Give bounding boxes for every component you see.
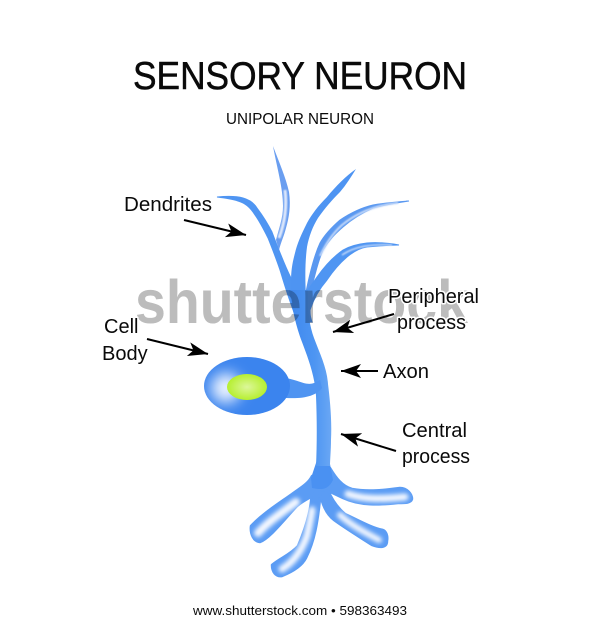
- label: Peripheral process: Peripheral: [388, 286, 479, 308]
- label: Axon: Axon: [383, 361, 429, 383]
- roots: [251, 468, 412, 576]
- label: Central process: Central: [402, 420, 467, 442]
- label: Cell Body: Body: [102, 343, 148, 365]
- label: Central process: [341, 420, 470, 468]
- root junction: [311, 460, 333, 489]
- arrow: central process: [341, 434, 396, 451]
- label: Cell Body: Cell: [104, 316, 138, 338]
- label: Peripheral process: process: [397, 312, 466, 334]
- cell body: [204, 357, 322, 415]
- label: Dendrites: [124, 194, 246, 235]
- label: Peripheral process: [333, 286, 479, 334]
- arrow: cell body: [147, 339, 208, 354]
- nucleus: [227, 374, 267, 400]
- label: Cell Body: [102, 316, 208, 365]
- subtitle: UNIPOLAR NEURON: [226, 111, 374, 128]
- watermark: shutterstock: [135, 268, 468, 336]
- arrow: dendrites: [184, 220, 246, 235]
- label: Dendrites: Dendrites: [124, 194, 212, 216]
- root highlights: [258, 494, 405, 569]
- trunk: [289, 290, 331, 466]
- dendrites: [217, 146, 409, 322]
- arrow: axon: [341, 370, 378, 372]
- neuron illustration: [204, 146, 412, 576]
- label: Central process: process: [402, 446, 470, 468]
- footer credit: www.shutterstock.com • 598363493: [192, 603, 407, 618]
- arrow: peripheral process: [333, 314, 394, 332]
- title: SENSORY NEURON: [133, 55, 467, 98]
- label: Axon: [341, 361, 429, 383]
